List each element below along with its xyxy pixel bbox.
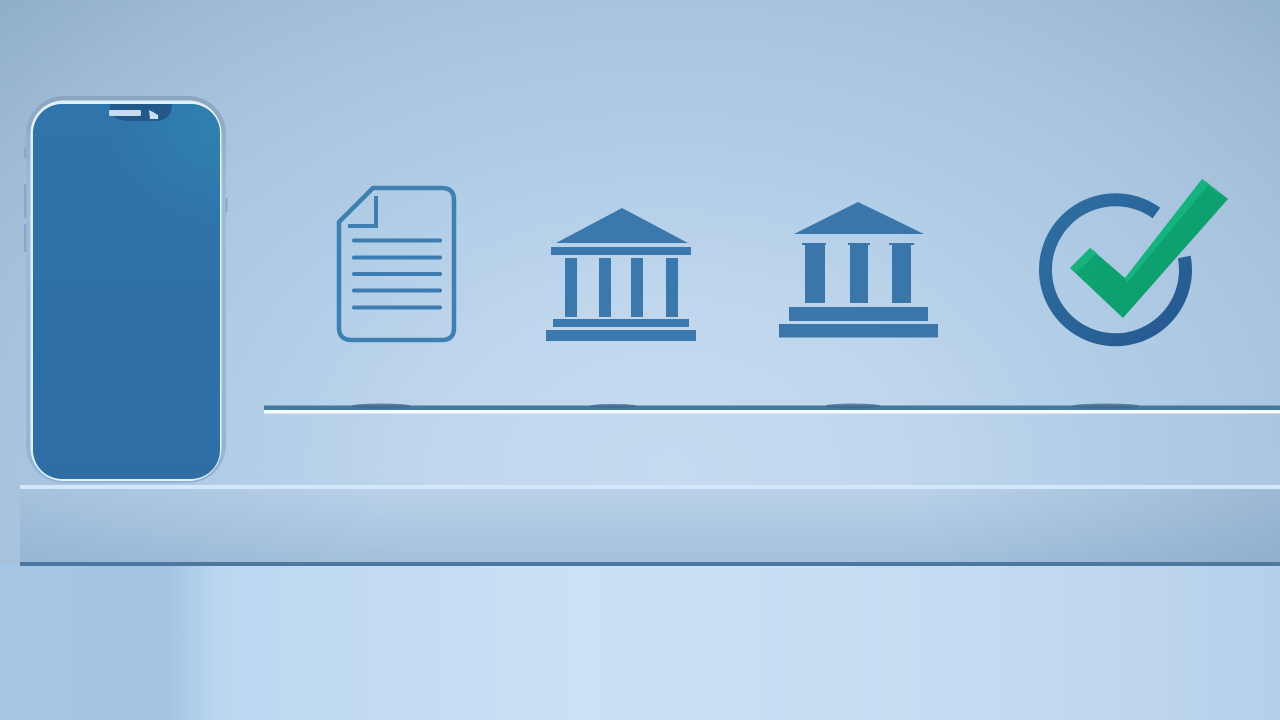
timeline rail (264, 404, 1280, 414)
bank one roof (556, 208, 688, 243)
bank one columns (565, 258, 678, 317)
bank two columns (802, 243, 914, 303)
icon: bank building two (779, 202, 938, 338)
document text lines (354, 240, 440, 308)
background wall (0, 0, 1280, 570)
phone speaker (109, 110, 141, 116)
phone camera (149, 110, 158, 119)
bank two roof (794, 202, 924, 234)
icon: approval check mark (1045, 179, 1228, 340)
bank two steps (779, 307, 938, 338)
icon: document (339, 188, 454, 340)
phone screen (33, 104, 220, 479)
phone bezel highlight (30, 100, 222, 481)
floor (0, 565, 1280, 720)
bank one steps (546, 319, 696, 341)
check ring (1045, 200, 1185, 340)
phone frame (26, 96, 226, 483)
rail shadow marks (351, 404, 1140, 408)
phone side buttons (24, 148, 228, 252)
smartphone (24, 96, 228, 483)
document corner fold (348, 196, 376, 226)
green check (1070, 179, 1228, 318)
icon: bank building one (546, 208, 696, 341)
ledge platform (20, 485, 1280, 566)
phone notch (110, 104, 172, 121)
